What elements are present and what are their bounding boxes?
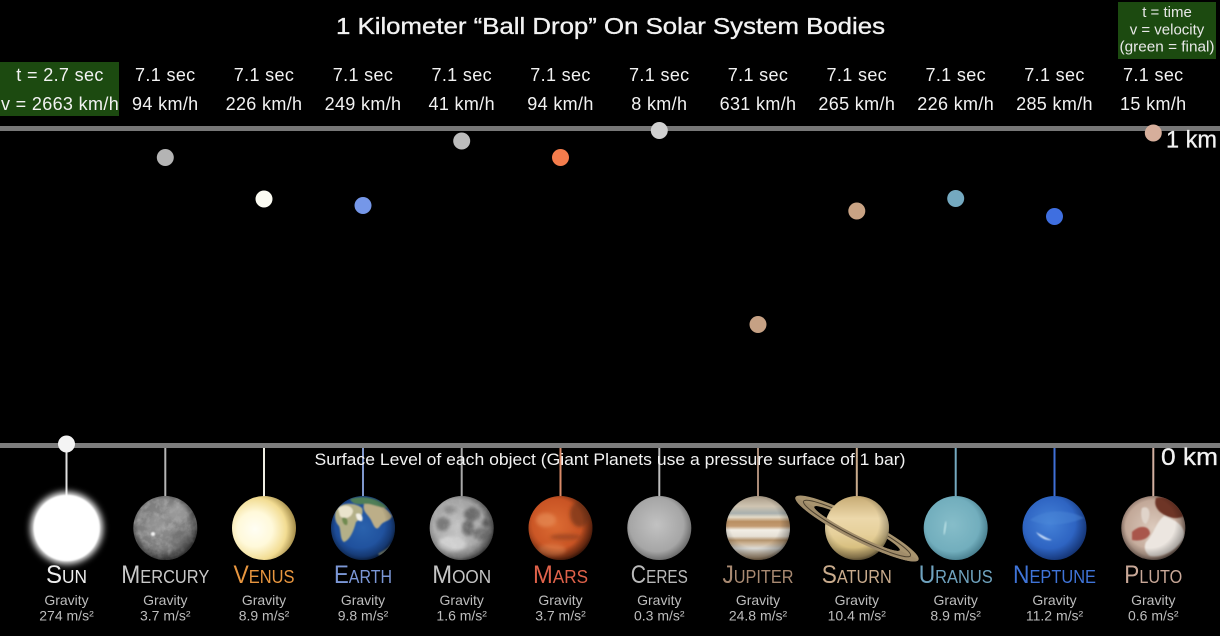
name: Mars: MARS bbox=[533, 561, 588, 589]
name: Jupiter: JUPITER bbox=[722, 561, 794, 589]
gravity values: 3.7 m/s² bbox=[535, 608, 586, 624]
gravity values: 0.6 m/s² bbox=[1128, 608, 1179, 624]
time and velocity readouts: 7.1 sec bbox=[234, 65, 294, 85]
time and velocity readouts: 631 km/h bbox=[720, 94, 796, 114]
gravity values: Gravity bbox=[143, 592, 187, 608]
legend box: t = time bbox=[1142, 4, 1192, 21]
gravity values: 1.6 m/s² bbox=[436, 608, 487, 624]
falling balls bbox=[58, 122, 1162, 452]
gravity values bbox=[39, 592, 1179, 624]
Saturn globe bbox=[825, 496, 889, 560]
gravity values: Gravity bbox=[440, 592, 484, 608]
planet: Moon bbox=[429, 496, 495, 560]
time and velocity readouts: 7.1 sec bbox=[1123, 65, 1184, 85]
time and velocity readouts: 7.1 sec bbox=[431, 65, 492, 85]
0 km line bbox=[0, 443, 1220, 448]
ball: Earth bbox=[354, 197, 372, 214]
Saturn front ring bbox=[795, 497, 918, 562]
names bbox=[46, 561, 1182, 589]
time and velocity readouts: 41 km/h bbox=[428, 94, 495, 114]
gravity values: Gravity bbox=[1131, 592, 1175, 608]
name: Saturn: SATURN bbox=[822, 561, 892, 589]
ball: Mars bbox=[552, 149, 569, 166]
legend box: v = velocity bbox=[1130, 22, 1205, 38]
gravity values: Gravity bbox=[835, 592, 879, 608]
ball: Saturn bbox=[848, 202, 865, 220]
time and velocity readouts: 7.1 sec bbox=[530, 65, 591, 85]
time and velocity readouts: 285 km/h bbox=[1016, 94, 1093, 114]
Saturn back ring bbox=[790, 487, 924, 570]
planet: Mars bbox=[528, 496, 592, 560]
gravity values: 0.3 m/s² bbox=[634, 608, 685, 624]
gravity values: Gravity bbox=[242, 592, 286, 608]
time and velocity readouts: 249 km/h bbox=[325, 94, 401, 114]
0 km label: 0 km bbox=[1161, 444, 1218, 471]
ball: Venus bbox=[256, 190, 272, 208]
time and velocity readouts bbox=[1, 65, 1187, 114]
time and velocity readouts: 15 km/h bbox=[1120, 94, 1187, 114]
gravity values: 8.9 m/s² bbox=[239, 608, 290, 624]
gravity values: 8.9 m/s² bbox=[930, 608, 981, 624]
ball: Pluto bbox=[1145, 124, 1162, 142]
gravity values: 9.8 m/s² bbox=[338, 608, 389, 624]
name: Earth: EARTH bbox=[334, 561, 392, 589]
planet: Saturn bbox=[795, 496, 919, 562]
gravity values: Gravity bbox=[934, 592, 978, 608]
time and velocity readouts: 7.1 sec bbox=[925, 65, 986, 85]
gravity values: Gravity bbox=[637, 592, 681, 608]
time and velocity readouts: 226 km/h bbox=[226, 94, 302, 114]
ball: Ceres bbox=[651, 122, 668, 139]
gravity values: Gravity bbox=[736, 592, 780, 608]
surface strings bbox=[66, 448, 1153, 498]
gravity values: Gravity bbox=[44, 592, 89, 608]
gravity values: 274 m/s² bbox=[39, 608, 94, 624]
planet: Jupiter bbox=[726, 496, 790, 560]
time and velocity readouts: 94 km/h bbox=[132, 94, 199, 114]
ball: Uranus bbox=[947, 190, 964, 207]
time and velocity readouts: 226 km/h bbox=[917, 94, 994, 114]
name: Uranus: URANUS bbox=[919, 561, 993, 589]
planet: Neptune bbox=[1022, 496, 1086, 560]
name: Ceres: CERES bbox=[631, 561, 688, 589]
planet: Uranus bbox=[924, 496, 988, 560]
title: 1 Kilometer “Ball Drop” On Solar System Bodies bbox=[336, 13, 885, 39]
final value box: Sun bbox=[0, 62, 119, 116]
gravity values: 3.7 m/s² bbox=[140, 608, 191, 624]
planet: Sun bbox=[31, 492, 103, 564]
legend box: (green = final) bbox=[1120, 38, 1215, 56]
planet: Ceres bbox=[627, 496, 691, 560]
time and velocity readouts: 8 km/h bbox=[631, 94, 687, 114]
surface level caption: Surface Level of each object (Giant Planets use a pressure surface of 1 bar) bbox=[314, 451, 906, 469]
gravity values: 24.8 m/s² bbox=[729, 608, 788, 624]
name: Sun: SUN bbox=[46, 561, 87, 589]
gravity values: 10.4 m/s² bbox=[828, 608, 886, 624]
planet: Pluto bbox=[1121, 496, 1185, 560]
gravity values: Gravity bbox=[341, 592, 385, 608]
time and velocity readouts: 265 km/h bbox=[818, 94, 895, 114]
planet: Mercury bbox=[133, 496, 197, 560]
time and velocity readouts: t = 2.7 sec bbox=[16, 65, 104, 85]
time and velocity readouts: 7.1 sec bbox=[1024, 65, 1085, 85]
name: Pluto: PLUTO bbox=[1124, 561, 1182, 589]
time and velocity readouts: 7.1 sec bbox=[135, 65, 196, 85]
time and velocity readouts: v = 2663 km/h bbox=[1, 94, 119, 114]
name: Moon: MOON bbox=[432, 561, 491, 589]
ball: Mercury bbox=[157, 149, 174, 166]
time and velocity readouts: 7.1 sec bbox=[728, 65, 788, 85]
ball: Moon bbox=[453, 132, 470, 150]
time and velocity readouts: 94 km/h bbox=[527, 94, 594, 114]
ball: Jupiter bbox=[750, 316, 766, 333]
gravity values: Gravity bbox=[1032, 592, 1077, 608]
name: Mercury: MERCURY bbox=[121, 561, 209, 589]
time and velocity readouts: 7.1 sec bbox=[827, 65, 887, 85]
name: Venus: VENUS bbox=[234, 561, 294, 589]
legend box bbox=[1118, 2, 1216, 59]
gravity values: 11.2 m/s² bbox=[1026, 608, 1083, 624]
gravity values: Gravity bbox=[538, 592, 583, 608]
planet: Earth bbox=[331, 496, 395, 560]
name: Neptune: NEPTUNE bbox=[1013, 561, 1096, 589]
time and velocity readouts: 7.1 sec bbox=[333, 65, 393, 85]
ball: Sun bbox=[58, 436, 75, 452]
ball: Neptune bbox=[1046, 208, 1063, 225]
1 km label: 1 km bbox=[1166, 126, 1217, 154]
1 km line bbox=[0, 126, 1220, 131]
time and velocity readouts: 7.1 sec bbox=[629, 65, 690, 85]
planet: Venus bbox=[232, 496, 296, 560]
